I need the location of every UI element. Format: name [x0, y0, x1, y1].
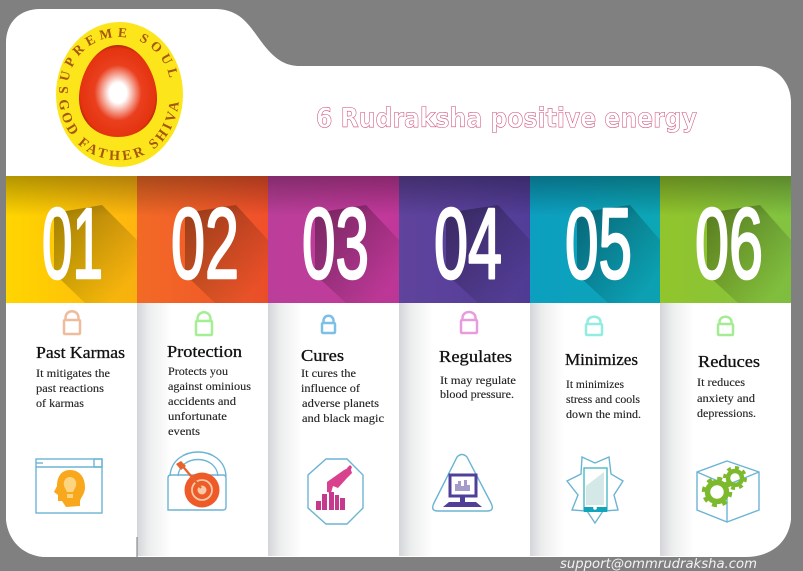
panel: number 02: 02	[171, 188, 239, 300]
panel: number 03: 03	[302, 188, 369, 300]
icon: star with phone	[567, 457, 623, 523]
text: regulates: Regulates	[439, 347, 512, 366]
text: protection: against ominious	[168, 381, 252, 393]
text: reduces: anxiety and	[697, 393, 755, 405]
text: past karmas: It mitigates the	[36, 368, 110, 380]
text: regulates	[439, 347, 516, 401]
panel: number 05: 05	[565, 188, 632, 300]
text: minimizes: Minimizes	[565, 350, 638, 369]
icon: lock 4	[461, 312, 477, 333]
icon: cube with gears	[697, 461, 759, 522]
text: protection: events	[168, 426, 201, 438]
text: cures	[301, 346, 384, 425]
text: minimizes: It minimizes	[566, 379, 625, 391]
panel: number 01	[6, 176, 137, 303]
text: reduces	[697, 352, 760, 420]
text: cures: and black magic	[302, 413, 384, 425]
text: protection: Protects you	[168, 366, 228, 378]
icon: octagon with hand and bars	[308, 459, 363, 524]
text: reduces: depressions.	[697, 408, 756, 420]
icon: lock 5	[586, 317, 602, 335]
logo: supreme soul egg: GOD FATHER SHIVA	[60, 100, 179, 160]
text: past karmas: of karmas	[36, 398, 85, 410]
logo: supreme soul egg	[56, 22, 183, 167]
icon: lock 6	[718, 317, 733, 335]
panel: column shading	[136, 303, 694, 557]
text: regulates: blood pressure.	[440, 389, 514, 401]
logo: supreme soul egg: SUPREME SOUL	[58, 28, 178, 94]
text: cures: Cures	[301, 346, 344, 365]
text: past karmas: past reactions	[36, 383, 105, 395]
text: minimizes	[565, 350, 641, 421]
icon: lock 2	[196, 312, 212, 335]
icon: lock 3	[322, 316, 335, 333]
text: protection: Protection	[167, 342, 242, 361]
icon: window with head and bulb	[36, 459, 102, 513]
icon: triangle with computer	[433, 454, 492, 511]
text: reduces: Reduces	[698, 352, 760, 371]
text: cures: adverse planets	[302, 398, 380, 410]
text: protection: unfortunate	[168, 411, 227, 423]
panel: number 04: 04	[434, 188, 502, 300]
text: regulates: It may regulate	[440, 375, 516, 387]
text: minimizes: stress and cools	[566, 394, 641, 406]
icon: lock 1	[64, 311, 80, 334]
panel: number 06	[660, 176, 791, 303]
text: past karmas	[36, 343, 125, 410]
text: past karmas: Past Karmas	[36, 343, 125, 362]
text: reduces: It reduces	[697, 377, 746, 389]
text: protection: accidents and	[168, 396, 236, 408]
text: protection	[167, 342, 252, 438]
text: cures: influence of	[301, 383, 360, 395]
icon: dome with target and arrow	[168, 452, 226, 510]
text: cures: It cures the	[301, 368, 356, 380]
panel: number 05	[530, 176, 660, 303]
panel: number 02	[137, 176, 268, 303]
panel: number 03	[268, 176, 399, 303]
panel: number 04	[399, 176, 530, 303]
panel: number 06: 06	[695, 188, 763, 300]
title: 6 Rudraksha positive energy	[316, 103, 697, 134]
panel: number 01: 01	[42, 188, 103, 300]
text: minimizes: down the mind.	[566, 409, 641, 421]
